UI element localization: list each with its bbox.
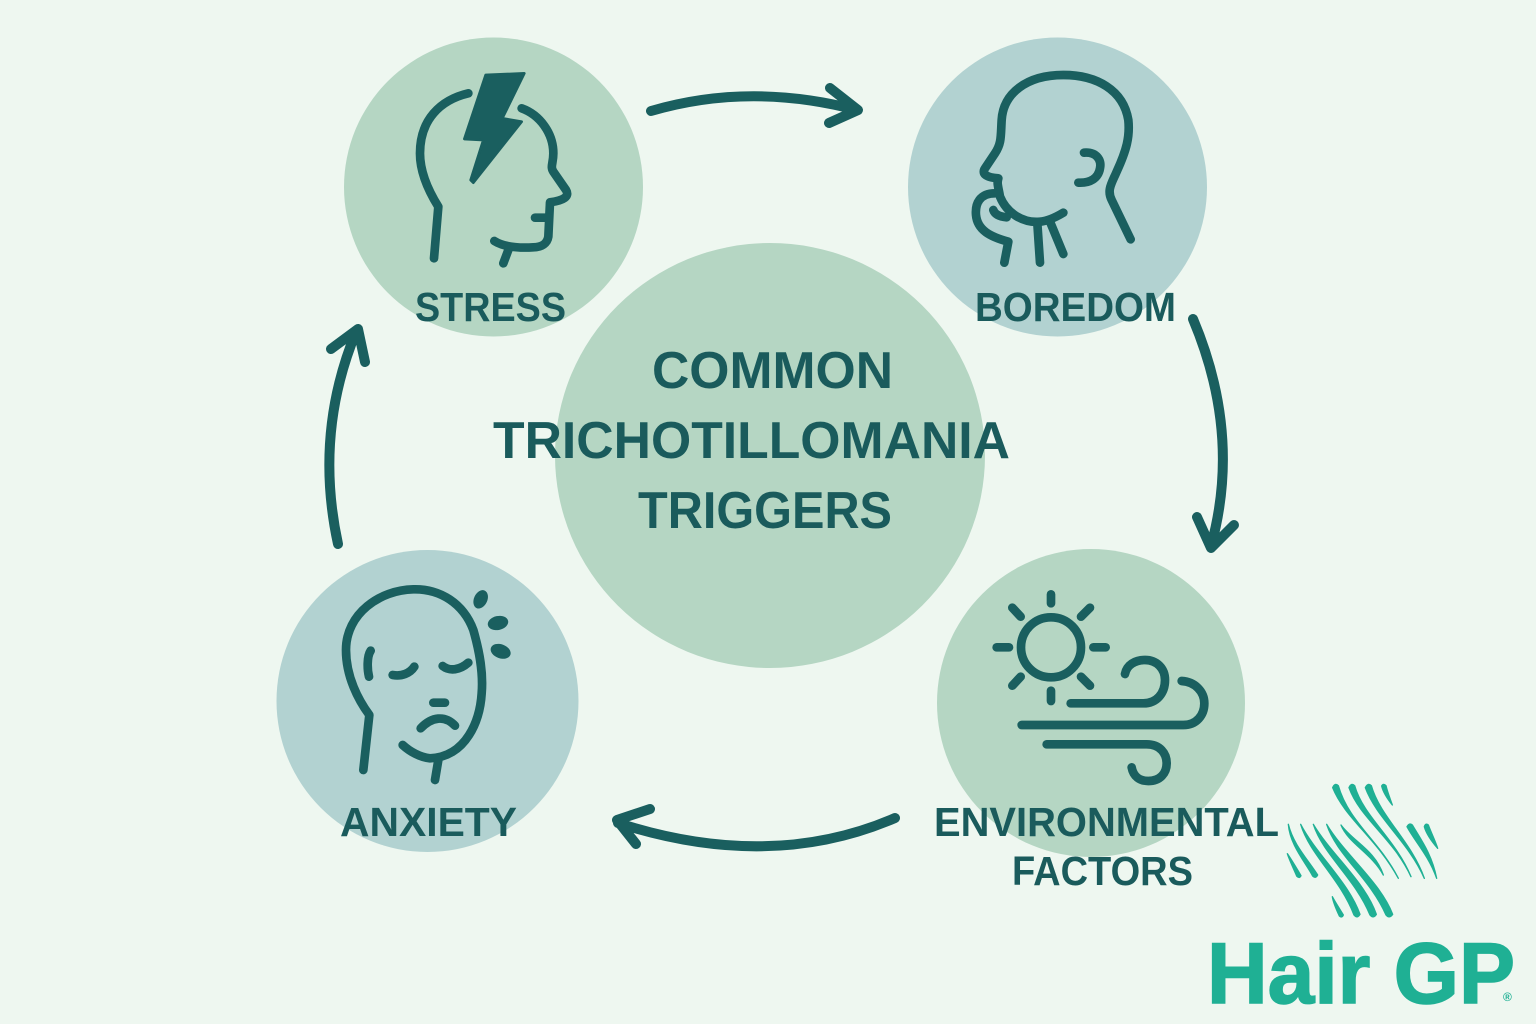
- arrow: anxiety to stress: [329, 329, 365, 544]
- label: stress: STRESS: [415, 284, 566, 330]
- label: environmental factors: FACTORS: [1012, 848, 1193, 894]
- title: [493, 342, 1010, 540]
- icon: head with lightning bolt: [420, 73, 567, 263]
- logo: Hair GP: [1207, 784, 1515, 1022]
- label: anxiety: ANXIETY: [340, 799, 517, 845]
- label: environmental factors: [934, 799, 1279, 894]
- panel: boredom: [908, 38, 1207, 336]
- icon: hair strand cross: [1287, 784, 1438, 917]
- logo wordmark: Hair GP: [1207, 926, 1515, 1022]
- label: boredom: BOREDOM: [975, 284, 1176, 330]
- title: TRIGGERS: [638, 482, 892, 540]
- title: TRICHOTILLOMANIA: [493, 412, 1010, 470]
- panel: centre title: [493, 243, 1010, 668]
- icon: sun and wind: [997, 594, 1204, 781]
- label: environmental factors: ENVIRONMENTAL: [934, 799, 1279, 845]
- title: COMMON: [652, 342, 893, 400]
- arrow: stress to boredom: [651, 88, 858, 123]
- arrow: environmental to anxiety: [617, 809, 895, 846]
- icon: head with hand on chin: [976, 75, 1131, 263]
- panel: environmental factors: [934, 549, 1279, 894]
- panel: anxiety: [276, 550, 578, 852]
- icon: worried face: [346, 588, 513, 780]
- panel: stress: [344, 38, 643, 336]
- registered mark: ®: [1503, 990, 1512, 1004]
- arrow: boredom to environmental: [1193, 319, 1234, 548]
